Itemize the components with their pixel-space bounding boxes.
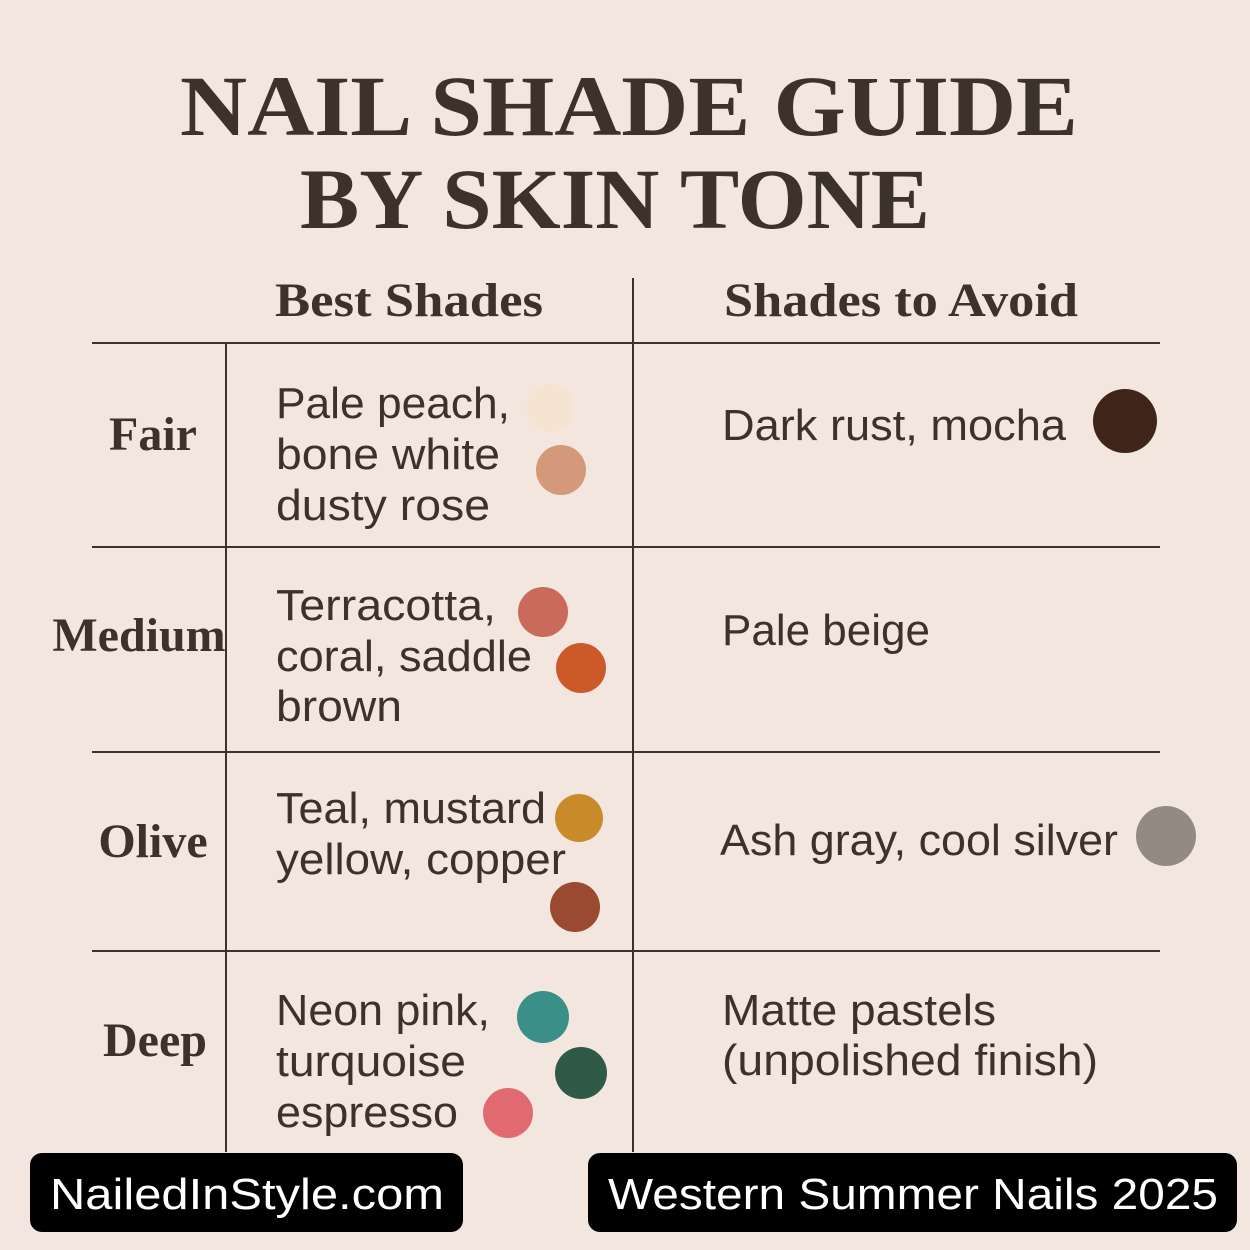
row: Olive [98,784,1196,932]
row: Deep: (unpolished finish) [722,1036,1098,1085]
title: BY SKIN TONE [300,151,930,247]
row: Olive: Ash gray, cool silver [720,816,1118,865]
row: Fair: Dark rust, mocha [722,401,1067,450]
row: Medium: brown [276,682,402,731]
row: Medium: Terracotta, [276,581,496,630]
row: Deep [103,986,1098,1138]
row: Fair: dusty rose [276,481,490,530]
row: Fair [109,379,1157,530]
title: NAIL SHADE GUIDE [180,58,1078,154]
row: Deep: Matte pastels [722,986,996,1035]
footer: site [30,1153,463,1232]
row: Deep: espresso [276,1088,458,1137]
row: Deep: Deep [103,1014,207,1067]
footer: site: NailedInStyle.com [50,1170,444,1219]
row: Medium: Medium [52,609,226,662]
footer: tag [588,1153,1237,1232]
column headers: Best Shades [275,274,543,327]
row: Fair: bone white [276,430,500,479]
row: Medium [52,581,930,731]
row: Medium: Pale beige [722,606,930,655]
column headers: Shades to Avoid [724,274,1078,327]
row: Olive: Teal, mustard [276,784,546,833]
column headers [275,274,1078,327]
footer: tag: Western Summer Nails 2025 [608,1170,1218,1219]
row: Deep: turquoise [276,1037,466,1086]
row: Olive: Olive [98,815,208,868]
row: Olive: yellow, copper [276,835,566,884]
row: Fair: Pale peach, [276,379,510,428]
row: Medium: coral, saddle [276,632,532,681]
row: Deep: Neon pink, [276,986,490,1035]
row: Fair: Fair [109,408,197,461]
title [180,58,1078,247]
